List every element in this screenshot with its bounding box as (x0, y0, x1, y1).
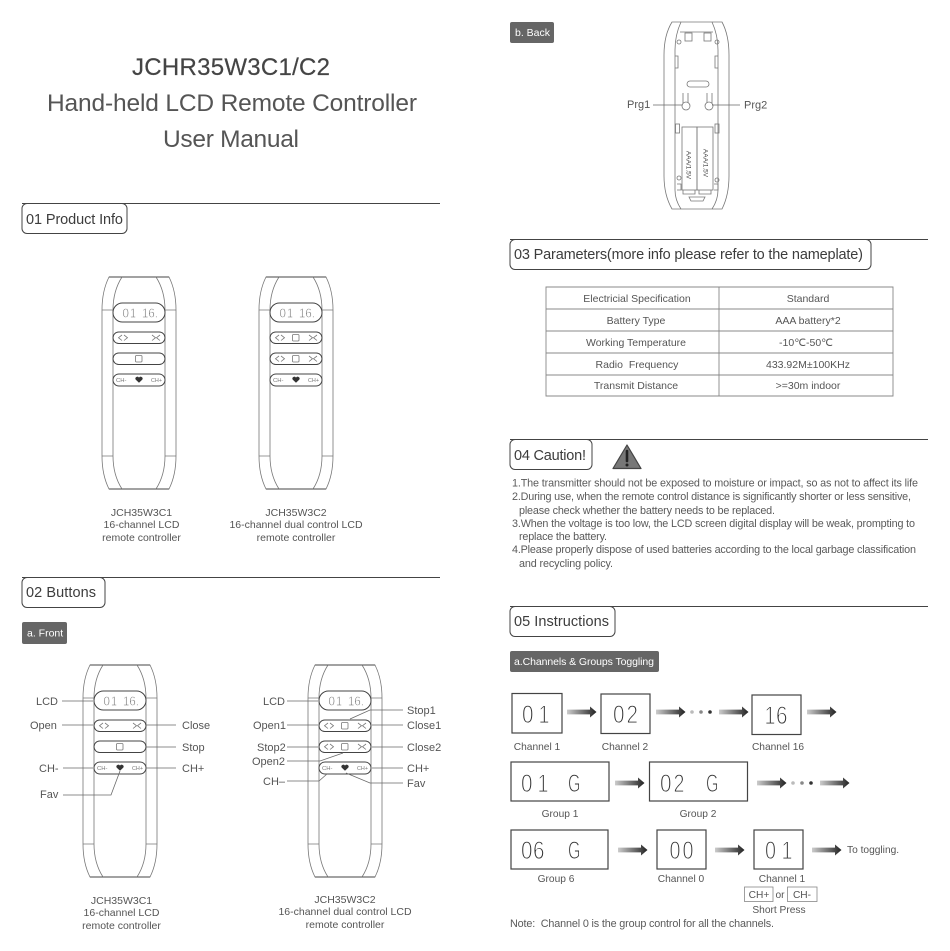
channel row: 1 (764, 702, 776, 730)
remote: JCH35W3C2 product view: CH+ (308, 378, 319, 384)
heading: 05 Instructions: 05 Instructions (514, 614, 609, 630)
title (47, 54, 417, 153)
remote: JCH35W3C2 buttons diagram: Close2 (407, 742, 441, 754)
remote: JCH35W3C1 buttons diagram: Fav (40, 789, 59, 801)
icon: warning triangle (613, 445, 641, 468)
parameters table: Working Temperature (586, 337, 686, 349)
group row: 1 (538, 770, 548, 798)
group row: G (568, 770, 580, 798)
caption: JCH35W3C2: JCH35W3C2 (265, 507, 327, 519)
remote: JCH35W3C1 buttons diagram: CH- (97, 766, 108, 772)
channel row (512, 694, 836, 753)
caption: JCH35W3C1 buttons: 16-channel LCD (84, 907, 160, 919)
group row: Group 1 (542, 809, 579, 820)
remote: JCH35W3C2 buttons diagram: CH– (263, 776, 286, 788)
group 6 and channel 0 row: CH+ (749, 890, 769, 901)
remote: JCH35W3C2 buttons diagram: Close1 (407, 720, 441, 732)
title: Hand-held LCD Remote Controller (47, 90, 417, 117)
caption: JCH35W3C1: JCH35W3C1 (111, 507, 172, 519)
remote: JCH35W3C2 buttons diagram: Fav (407, 778, 426, 790)
heading: 01 Product Info (22, 204, 440, 234)
label: a.Channels & Groups Toggling (510, 651, 659, 672)
caution text: 3.When the voltage is too low, the LCD screen digital display will be weak, prompting to (512, 518, 915, 530)
group 6 and channel 0 row: 0 (765, 837, 776, 865)
remote: JCH35W3C1 product view: 1 (130, 306, 136, 320)
caption: JCH35W3C2 buttons: 16-channel dual control LCD (278, 906, 412, 918)
parameters table: Electricial Specification (583, 293, 691, 305)
parameters table: Transmit Distance (594, 380, 678, 392)
group 6 and channel 0 row: 0 (670, 837, 680, 865)
caption: JCH35W3C1 buttons: JCH35W3C1 (91, 895, 152, 907)
channel row: 2 (626, 701, 638, 729)
caution text: 4.Please properly dispose of used batteries according to the local garbage classification (512, 544, 916, 556)
heading: 04 Caution (510, 440, 928, 470)
caption: JCH35W3C2: remote controller (257, 532, 336, 544)
parameters table (546, 287, 893, 396)
note: Note: Channel 0 is the group control for all the channels. (510, 918, 774, 930)
caution text: please check whether the battery needs to be replaced. (519, 505, 775, 517)
label: a. Front (22, 622, 67, 644)
caution text: 2.During use, when the remote control distance is significantly shorter or less sensitive, (512, 491, 911, 503)
remote: JCH35W3C2 product view (259, 277, 333, 489)
title: JCHR35W3C1/C2 (132, 54, 330, 81)
label: b. Back (510, 22, 554, 43)
group row: 2 (674, 770, 684, 798)
remote back view (627, 22, 767, 209)
group 6 and channel 0 row: CH- (793, 890, 811, 901)
remote: JCH35W3C2 buttons diagram: CH+ (407, 763, 429, 775)
caution text: 1.The transmitter should not be exposed to moisture or impact, so as not to affect its life (512, 478, 918, 490)
remote: JCH35W3C1 buttons diagram: CH- (39, 763, 59, 775)
group row: 0 (660, 770, 672, 798)
title: User Manual (163, 126, 299, 153)
group 6 and channel 0 row: G (568, 837, 580, 865)
heading: 02 Buttons: 02 Buttons (26, 585, 96, 601)
remote: JCH35W3C1 buttons diagram: 1 (111, 694, 117, 708)
remote: JCH35W3C2 product view: 0 (280, 306, 286, 320)
remote: JCH35W3C2 product view: 16. (299, 306, 315, 320)
remote: JCH35W3C2 buttons diagram: CH- (322, 766, 333, 772)
caption: JCH35W3C2 buttons: JCH35W3C2 (314, 894, 376, 906)
remote: JCH35W3C1 buttons diagram: Close (182, 720, 210, 732)
remote: JCH35W3C2 buttons diagram: Stop1 (407, 705, 436, 717)
remote: JCH35W3C1 product view (102, 277, 176, 489)
group 6 and channel 0 row: 1 (782, 837, 792, 865)
remote back view: AAA/1.5V (702, 149, 708, 178)
group row: Group 2 (680, 809, 717, 820)
channel row: 6 (776, 702, 788, 730)
group 6 and channel 0 row: 6 (533, 837, 544, 865)
remote: JCH35W3C1 buttons diagram: 0 (104, 694, 110, 708)
label: a. Front: a. Front (27, 628, 63, 640)
group 6 and channel 0 row: Group 6 (538, 874, 575, 885)
parameters table: Standard (787, 293, 829, 305)
group row (511, 762, 850, 820)
remote: JCH35W3C1 product view: CH- (116, 378, 127, 384)
parameters table: 433.92M±100KHz (766, 359, 850, 371)
group 6 and channel 0 row: Channel 1 (759, 874, 806, 885)
caution text: replace the battery. (519, 531, 607, 543)
remote: JCH35W3C1 buttons diagram: CH+ (132, 766, 143, 772)
parameters table: Battery Type (607, 315, 666, 327)
caption: JCH35W3C1: remote controller (102, 532, 181, 544)
remote: JCH35W3C2 buttons diagram (252, 665, 441, 877)
remote: JCH35W3C2 product view: CH- (273, 378, 284, 384)
label: b. Back: b. Back (515, 27, 551, 39)
heading: 05 Instructions (510, 606, 928, 636)
remote: JCH35W3C2 buttons diagram: CH+ (357, 766, 368, 772)
remote back view: Prg2 (744, 100, 767, 112)
remote: JCH35W3C2 buttons diagram: 1 (336, 694, 342, 708)
remote: JCH35W3C2 buttons diagram: Open2 (252, 756, 285, 768)
remote: JCH35W3C1 buttons diagram (30, 665, 210, 877)
group row: 0 (521, 770, 532, 798)
label: a.Channels & Groups Toggling: a.Channels & Groups Toggling (514, 656, 654, 668)
caption: JCH35W3C2 buttons: remote controller (306, 919, 385, 931)
group 6 and channel 0 row (511, 830, 899, 916)
group 6 and channel 0 row: Channel 0 (658, 874, 705, 885)
remote: JCH35W3C1 product view: 16. (142, 306, 158, 320)
caption: JCH35W3C1: 16-channel LCD (104, 519, 180, 531)
remote: JCH35W3C1 buttons diagram: 16. (123, 694, 139, 708)
caution text: and recycling policy. (519, 558, 613, 570)
parameters table: Radio Frequency (596, 359, 679, 371)
parameters table: >=30m indoor (776, 380, 841, 392)
channel row: 0 (613, 701, 624, 729)
group 6 and channel 0 row: To toggling. (847, 845, 899, 856)
remote: JCH35W3C1 buttons diagram: Stop (182, 742, 205, 754)
remote: JCH35W3C2 product view: 1 (287, 306, 293, 320)
remote: JCH35W3C2 buttons diagram: 16. (348, 694, 364, 708)
caption: JCH35W3C2: 16-channel dual control LCD (229, 519, 363, 531)
heading: 03 Parameters: 03 Parameters(more info please refer to the nameplate) (514, 247, 863, 263)
remote back view: AAA/1.5V (684, 151, 692, 180)
remote back view: Prg1 (627, 99, 650, 111)
group 6 and channel 0 row: 0 (521, 837, 532, 865)
parameters table: -10℃-50℃ (779, 337, 833, 349)
group 6 and channel 0 row: Short Press (752, 905, 806, 916)
remote: JCH35W3C1 product view: CH+ (151, 378, 162, 384)
channel row: 1 (538, 701, 550, 729)
channel row: Channel 2 (602, 742, 649, 753)
parameters table: AAA battery*2 (775, 315, 841, 327)
channel row: Channel 16 (752, 742, 804, 753)
caution text (512, 478, 918, 570)
remote: JCH35W3C2 buttons diagram: Open1 (253, 720, 286, 732)
heading: 02 Buttons (22, 578, 440, 608)
remote: JCH35W3C2 buttons diagram: 0 (328, 694, 335, 708)
heading: 01 Product Info: 01 Product Info (26, 212, 123, 228)
remote: JCH35W3C2 buttons diagram: Stop2 (257, 742, 286, 754)
heading: 03 Parameters (510, 240, 928, 270)
channel row: 0 (522, 701, 534, 729)
remote: JCH35W3C1 buttons diagram: LCD (36, 696, 58, 708)
channel row: Channel 1 (514, 742, 561, 753)
remote: JCH35W3C1 product view: 0 (122, 306, 129, 320)
group 6 and channel 0 row: or (775, 890, 785, 901)
group 6 and channel 0 row: 0 (682, 837, 694, 865)
remote: JCH35W3C1 buttons diagram: Open (30, 720, 57, 732)
caption: JCH35W3C1 buttons: remote controller (82, 920, 161, 932)
remote: JCH35W3C2 buttons diagram: LCD (263, 696, 285, 708)
group row: G (706, 770, 718, 798)
heading: 04 Caution: 04 Caution! (514, 448, 586, 464)
remote: JCH35W3C1 buttons diagram: CH+ (182, 763, 204, 775)
